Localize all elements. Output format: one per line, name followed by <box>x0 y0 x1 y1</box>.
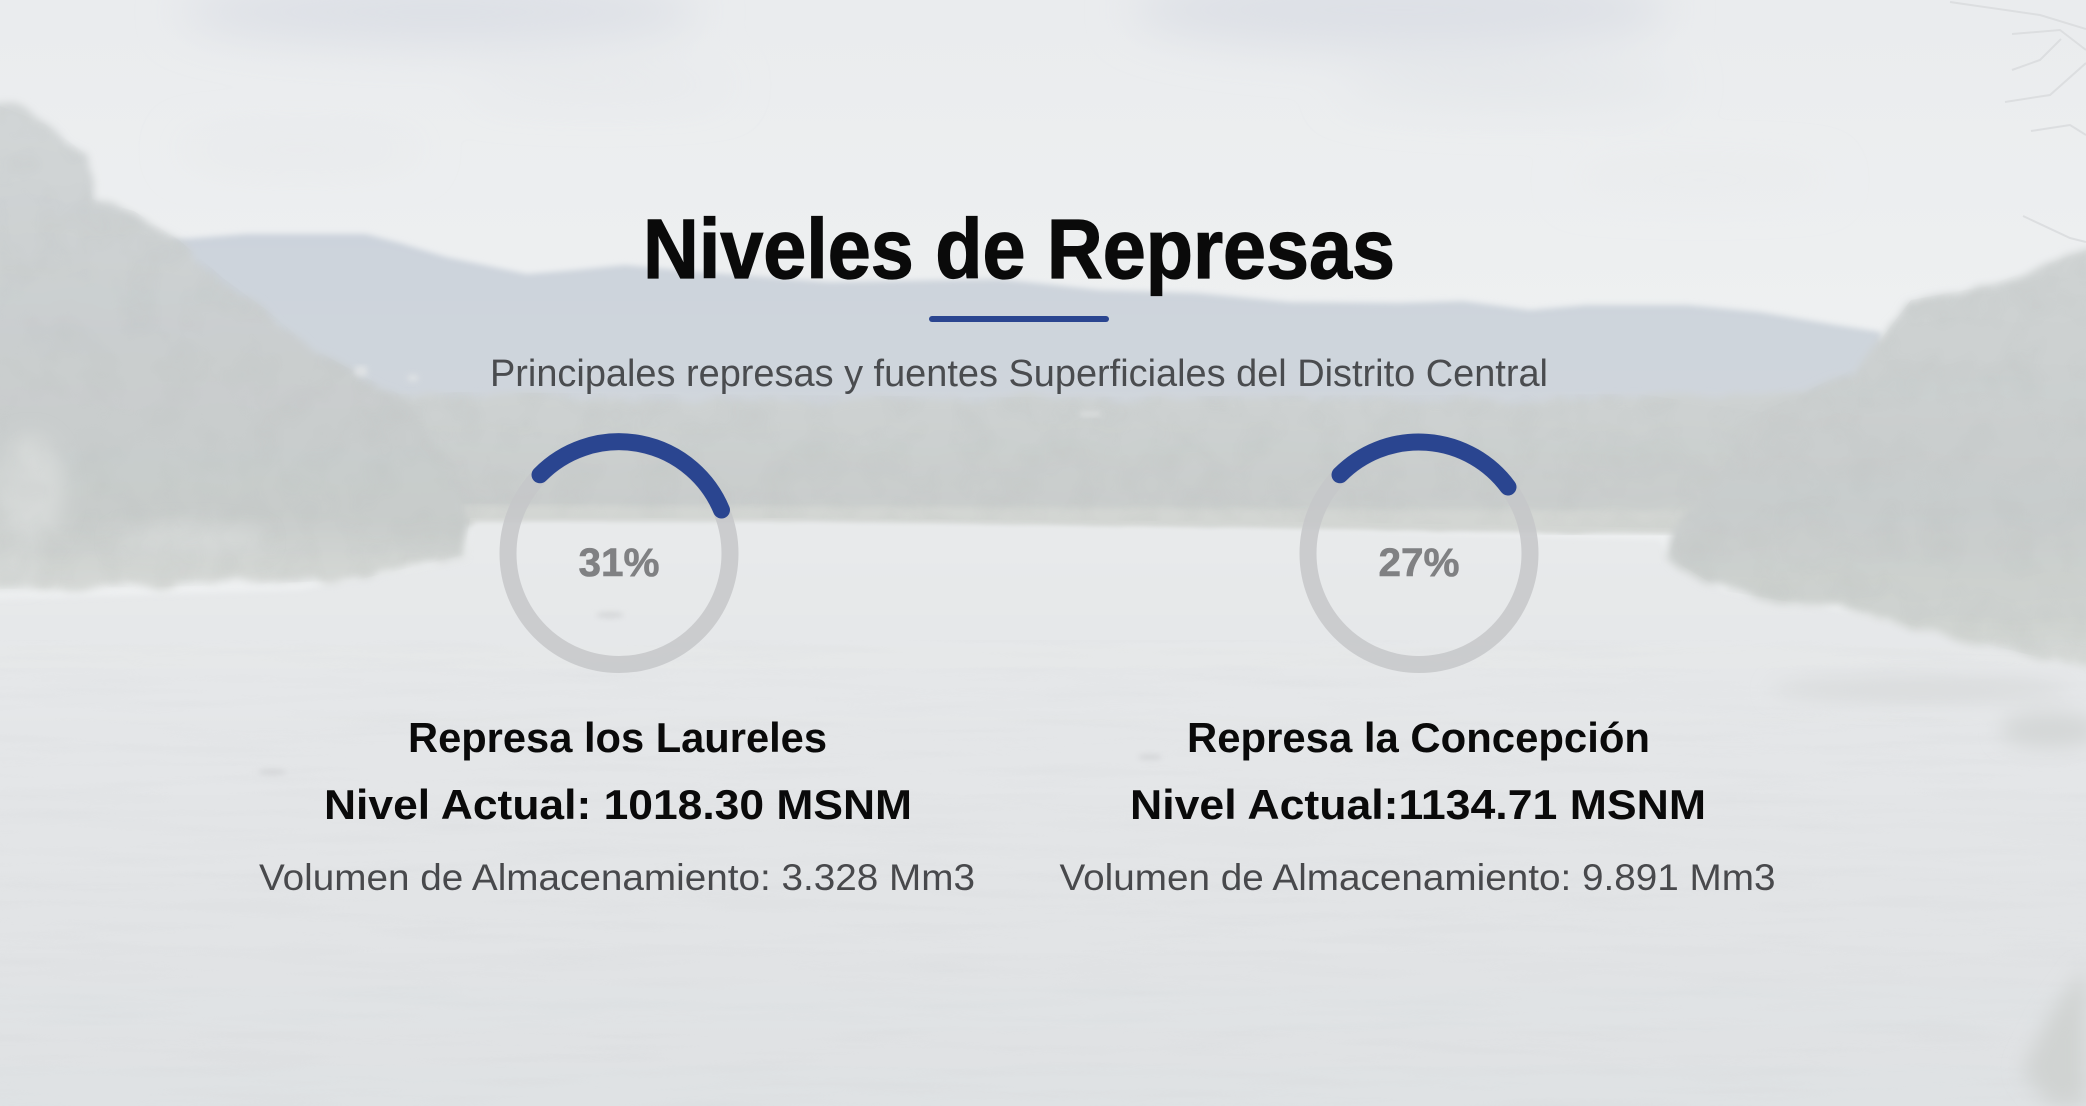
storage volume: Volumen de Almacenamiento: 3.328 Mm3 <box>259 857 975 898</box>
dam name: Represa la Concepción <box>1187 714 1650 761</box>
dam name: Represa los Laureles <box>408 714 827 761</box>
panel: Represa la Concepción <box>1060 442 1776 898</box>
storage volume: Volumen de Almacenamiento: 9.891 Mm3 <box>1060 857 1776 898</box>
title underline <box>929 316 1109 322</box>
subtitle: Principales represas y fuentes Superficiales del Distrito Central <box>490 353 1548 395</box>
current level: Nivel Actual: 1018.30 MSNM <box>324 781 912 828</box>
title: Niveles de Represas <box>643 202 1395 296</box>
gauge: 27% <box>1308 442 1530 664</box>
panel: Represa los Laureles <box>259 442 975 898</box>
gauge: 31%: 31% <box>578 541 660 585</box>
gauge: 31% <box>508 442 730 664</box>
gauge: 27%: 27% <box>1378 541 1460 585</box>
current level: Nivel Actual:1134.71 MSNM <box>1130 781 1706 828</box>
